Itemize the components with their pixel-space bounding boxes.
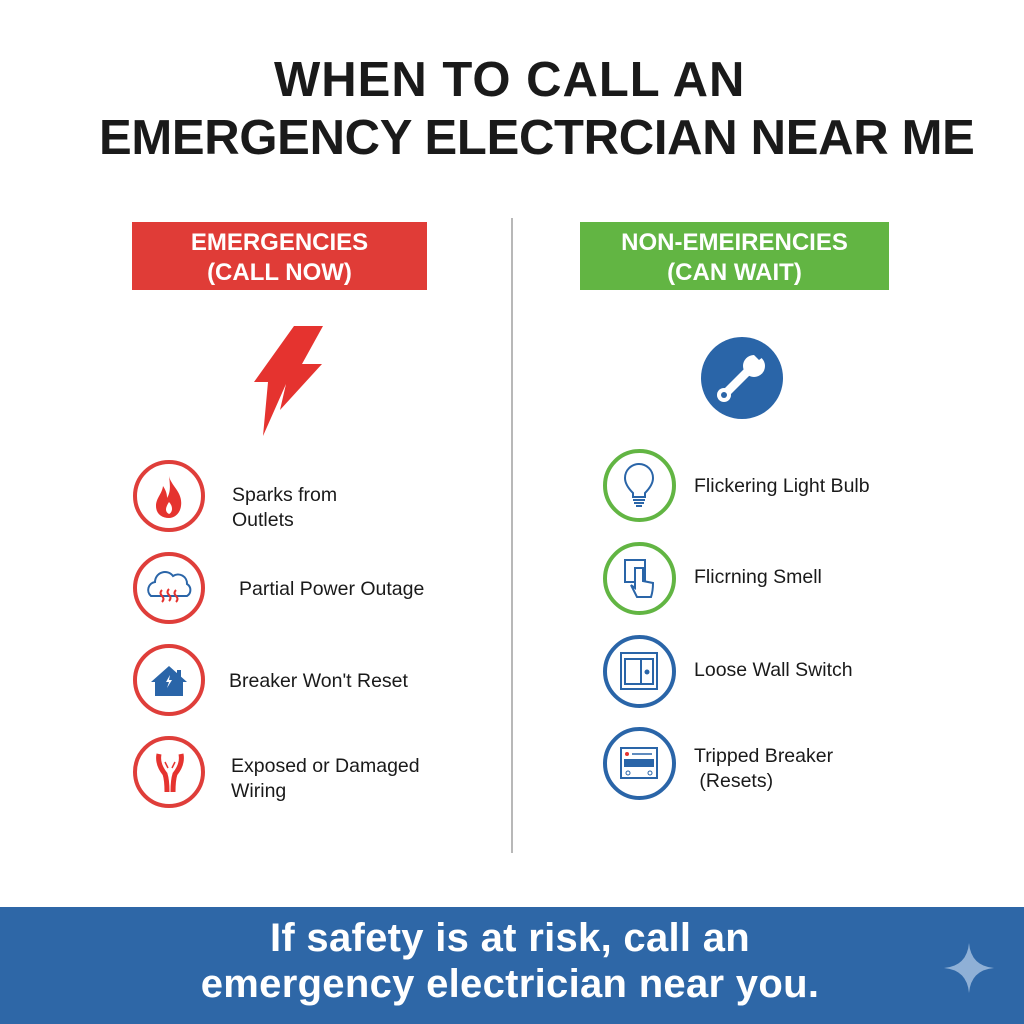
panel: emergencies list [133, 460, 424, 808]
banner: emergencies [132, 222, 427, 290]
item: loose wall switch: Loose Wall Switch [694, 659, 853, 681]
item: exposed wiring: Wiring [231, 780, 286, 802]
banner: emergencies: (CALL NOW) [207, 259, 352, 286]
item: exposed wiring: Exposed or Damaged [231, 755, 420, 777]
item: tripped breaker: Tripped Breaker [694, 745, 833, 767]
footer text: emergency electrician near you. [201, 962, 819, 1006]
item: tripped breaker: (Resets) [699, 770, 773, 792]
title: EMERGENCY ELECTRCIAN NEAR ME [99, 111, 974, 165]
banner: non-emergencies: (CAN WAIT) [667, 259, 802, 286]
item: sparks [133, 460, 337, 532]
icon: wrench [701, 337, 783, 419]
item: flickering light bulb [603, 449, 870, 522]
item: flickering light bulb: Flickering Light Bulb [694, 475, 870, 497]
item: sparks: Outlets [232, 509, 294, 531]
footer banner [0, 907, 1024, 1024]
banner: non-emergencies [580, 222, 889, 290]
item: sparks: Sparks from [232, 484, 337, 506]
footer text: If safety is at risk, call an [270, 916, 750, 960]
item: flicrning smell [603, 542, 822, 615]
panel: non-emergencies list [603, 449, 870, 800]
item: partial power outage: Partial Power Outage [239, 578, 424, 600]
title [99, 53, 974, 165]
icon: sparkle [944, 944, 994, 992]
icon: lightning bolt [254, 326, 323, 436]
title: WHEN TO CALL AN [274, 53, 745, 107]
item: partial power outage [133, 552, 424, 624]
item: flicrning smell: Flicrning Smell [694, 566, 822, 588]
item: loose wall switch [603, 635, 853, 708]
banner: non-emergencies: NON-EMEIRENCIES [621, 229, 848, 256]
footer text [201, 916, 819, 1006]
item: tripped breaker [603, 727, 833, 800]
item: breaker won't reset: Breaker Won't Reset [229, 670, 408, 692]
banner: emergencies: EMERGENCIES [191, 229, 368, 256]
item: breaker won't reset [133, 644, 408, 716]
item: exposed wiring [133, 736, 420, 808]
